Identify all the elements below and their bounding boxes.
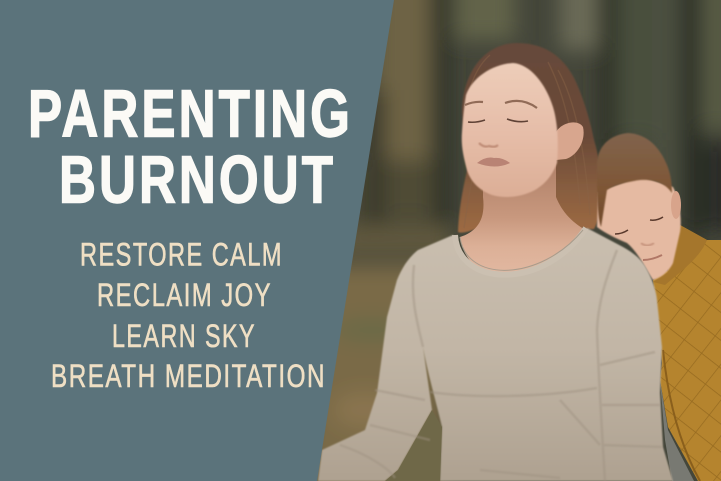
boy hair xyxy=(597,133,672,227)
mouth xyxy=(477,158,510,166)
boy mouth xyxy=(643,255,662,260)
title: PARENTING xyxy=(28,76,353,152)
eyebrows xyxy=(465,101,537,108)
jacket collar xyxy=(653,225,707,285)
hair xyxy=(458,43,601,233)
sleeve seams and folds xyxy=(340,250,662,481)
face xyxy=(462,63,558,197)
grey undershirt xyxy=(660,380,694,481)
woman xyxy=(458,43,601,276)
ear xyxy=(556,122,584,160)
photo background: forest xyxy=(300,0,721,481)
teal title panel xyxy=(0,0,394,481)
subtitle xyxy=(51,236,326,394)
subtitle: RESTORE CALM xyxy=(80,236,283,272)
eyes xyxy=(468,119,528,122)
boy eyes xyxy=(615,217,663,234)
woman's shirt xyxy=(318,228,673,481)
boy nose xyxy=(641,243,654,246)
background gap between arm and torso xyxy=(385,410,442,481)
subtitle: RECLAIM JOY xyxy=(97,277,272,313)
boy jacket xyxy=(653,225,721,481)
boy ear xyxy=(671,191,681,219)
boy face xyxy=(597,176,681,280)
title xyxy=(28,76,353,218)
neck xyxy=(460,160,584,276)
subtitle: LEARN SKY xyxy=(112,318,256,354)
title: BURNOUT xyxy=(59,142,336,218)
subtitle: BREATH MEDITATION xyxy=(51,358,326,394)
nose xyxy=(479,143,498,147)
boy xyxy=(597,133,721,481)
shirt collar xyxy=(455,228,586,275)
